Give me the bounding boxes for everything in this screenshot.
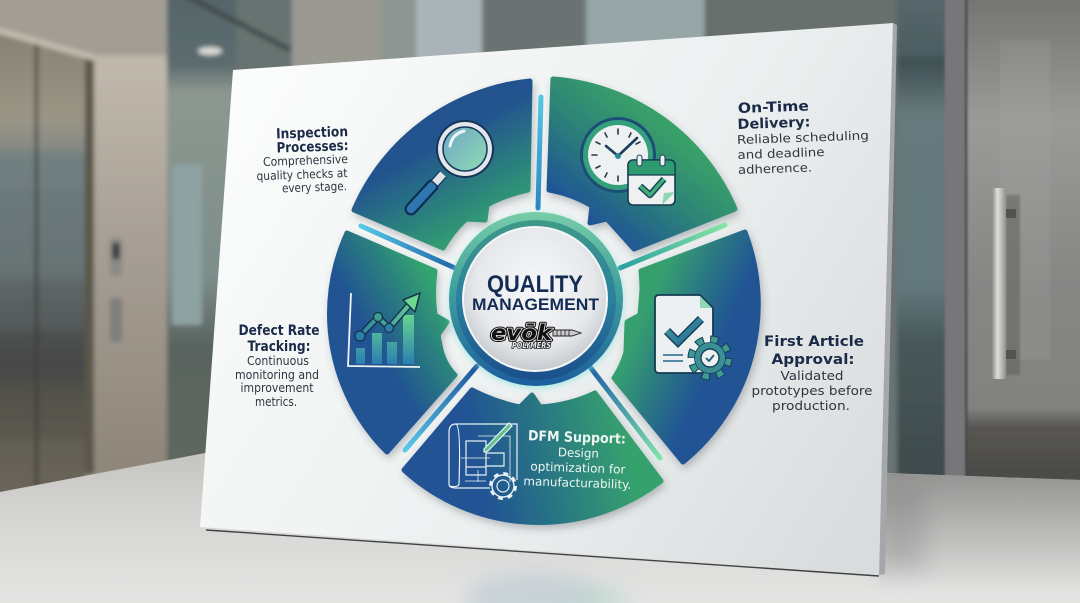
connector lines [361, 97, 725, 458]
label: on-time delivery: On-Time [738, 99, 809, 117]
logo: evok polymers [491, 321, 581, 350]
icon: rising bar chart [348, 293, 420, 367]
segment: defect rate tracking [330, 233, 455, 452]
icon: blueprint with pencil and gear [449, 423, 517, 498]
label: defect rate tracking: improvement [240, 381, 314, 395]
table surface [0, 453, 1080, 603]
heading: quality management: QUALITY [487, 271, 583, 298]
label: first article approval: production. [772, 399, 850, 413]
segment: inspection processes [354, 81, 530, 248]
label: first article approval: Approval: [772, 352, 854, 368]
text: DFM support [523, 428, 633, 492]
label: on-time delivery: and deadline [737, 145, 825, 162]
label: on-time delivery: Reliable scheduling [737, 128, 869, 147]
display board [200, 23, 897, 576]
label: inspection processes: quality checks at [256, 166, 348, 183]
center hub [449, 212, 623, 386]
text: DFM support: DFM Support: [528, 428, 626, 448]
label: inspection processes: Inspection [276, 124, 348, 143]
label: inspection processes: Processes: [276, 138, 349, 157]
segment: on-time delivery [549, 79, 735, 249]
label: on-time delivery [736, 96, 870, 177]
icon: clock and calendar [580, 117, 675, 205]
label: defect rate tracking: Continuous [247, 354, 309, 368]
label: defect rate tracking: Tracking: [248, 339, 310, 355]
segment: first article approval [614, 232, 758, 462]
logo: evok polymers: evōk [491, 321, 554, 345]
text: DFM support: manufacturability. [523, 474, 632, 492]
segment: DFM support [404, 390, 661, 522]
text: DFM support: optimization for [530, 459, 626, 477]
label: inspection processes: Comprehensive [263, 152, 348, 169]
label: on-time delivery: Delivery: [737, 114, 811, 133]
label: defect rate tracking [235, 323, 320, 409]
door handle [992, 188, 1020, 379]
heading: quality management: MANAGEMENT [472, 295, 600, 314]
logo: evok polymers: POLYMERS [512, 341, 551, 350]
label: on-time delivery: adherence. [738, 160, 812, 177]
label: inspection processes: every stage. [282, 179, 347, 195]
logo: evok polymers: evōk [491, 321, 554, 345]
heading: quality management [472, 271, 600, 314]
icon: magnifying glass [411, 120, 494, 209]
label: first article approval [752, 334, 872, 413]
icon: approved document with gear [655, 295, 728, 376]
text: DFM support: Design [558, 445, 599, 461]
label: first article approval: Validated [780, 369, 844, 383]
label: defect rate tracking: Defect Rate [238, 323, 320, 339]
label: defect rate tracking: monitoring and [235, 368, 319, 382]
label: inspection processes [255, 124, 350, 196]
logo: evok polymers: evōk [491, 321, 554, 345]
label: defect rate tracking: metrics. [255, 395, 297, 409]
label: first article approval: First Article [764, 334, 864, 350]
label: first article approval: prototypes before [752, 384, 872, 398]
